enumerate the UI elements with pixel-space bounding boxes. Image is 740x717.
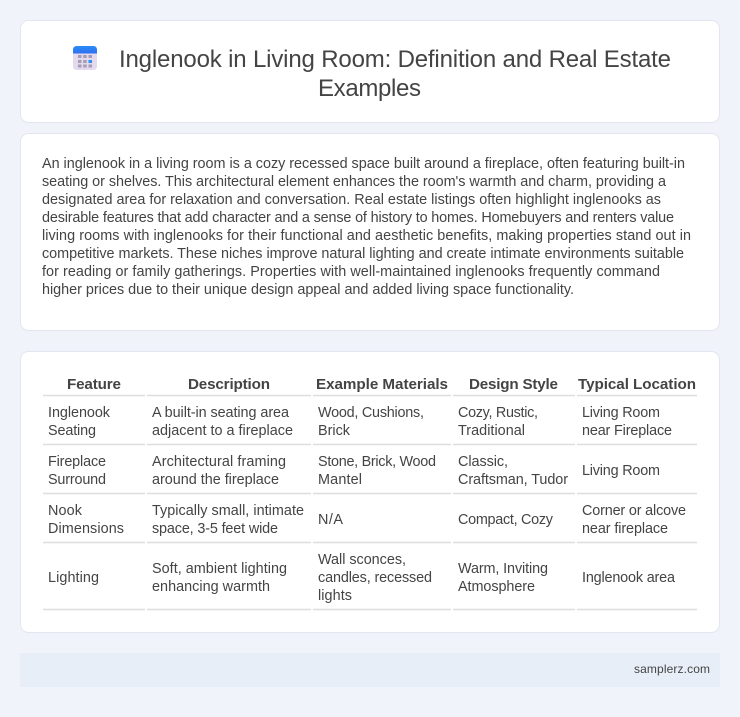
- panel: feature table: [20, 352, 720, 632]
- table row: Inglenook Seating: Cozy, Rustic,: [458, 405, 538, 421]
- table row: Lighting: Soft, ambient lighting: [152, 561, 287, 577]
- table row: Nook Dimensions: Dimensions: [48, 521, 124, 537]
- text block: introduction paragraph: [42, 156, 691, 298]
- text block: introduction paragraph: An inglenook in a living room is a cozy recessed space built around a fireplace, often featuring built-in: [42, 156, 685, 172]
- table header: [43, 376, 697, 396]
- table row: Fireplace Surround: Surround: [48, 472, 106, 488]
- table row: Nook Dimensions: Typically small, intimate: [152, 503, 304, 519]
- title: Inglenook in Living Room: Definition and Real Estate: [119, 46, 671, 73]
- table header: Design Style: [469, 376, 558, 393]
- title: Examples: [318, 75, 421, 102]
- table header: Example Materials: [316, 376, 448, 393]
- table row: Lighting: Wall sconces,: [318, 552, 406, 568]
- table row: Fireplace Surround: Living Room: [582, 463, 660, 479]
- table row: Lighting: Atmosphere: [458, 579, 535, 595]
- table row: Lighting: Warm, Inviting: [458, 561, 548, 577]
- table row: Fireplace Surround: around the fireplace: [152, 472, 279, 488]
- table row: Nook Dimensions: Corner or alcove: [582, 503, 686, 519]
- title: [119, 46, 671, 102]
- text block: introduction paragraph: competitive markets. These niches improve natural lighting and create intimate environments suitable: [42, 246, 684, 262]
- table row: Lighting: enhancing warmth: [152, 579, 270, 595]
- text block: introduction paragraph: higher prices due to their unique design appeal and added living space functionality.: [42, 282, 574, 298]
- table row: Inglenook Seating: [43, 405, 697, 444]
- text block: introduction paragraph: for reading or family gatherings. Properties with well-maintained inglenooks frequently command: [42, 264, 660, 280]
- table header: Typical Location: [578, 376, 696, 393]
- table row: Fireplace Surround: Craftsman, Tudor: [458, 472, 568, 488]
- table row: Inglenook Seating: Living Room: [582, 405, 660, 421]
- text block: introduction paragraph: living rooms with inglenooks for their functional and aesthetic benefits, making properties stand out in: [42, 228, 691, 244]
- table row: Lighting: [43, 552, 697, 610]
- table row: Inglenook Seating: near Fireplace: [582, 423, 672, 439]
- footer: samplerz.com: [634, 662, 710, 676]
- panel: header: [20, 20, 720, 122]
- table row: Nook Dimensions: near fireplace: [582, 521, 668, 537]
- table row: Inglenook Seating: Seating: [48, 423, 96, 439]
- table row: Inglenook Seating: adjacent to a fireplace: [152, 423, 293, 439]
- table row: Fireplace Surround: Mantel: [318, 472, 362, 488]
- text block: introduction paragraph: designated area for relaxation and conversation. Real estate listings often highlight inglenooks as: [42, 192, 661, 208]
- text block: introduction paragraph: seating or shelves. This architectural element enhances the room's warmth and charm, providing a: [42, 174, 666, 190]
- table row: Fireplace Surround: [43, 454, 697, 494]
- table row: Nook Dimensions: N/A: [318, 512, 343, 528]
- table row: Fireplace Surround: Classic,: [458, 454, 508, 470]
- icon: calendar: [73, 46, 97, 70]
- table row: Lighting: lights: [318, 588, 352, 604]
- footer: [20, 653, 720, 687]
- text block: introduction paragraph: desirable features that add character and a sense of history to homes. Homebuyers and renters value: [42, 210, 674, 226]
- table row: Inglenook Seating: Brick: [318, 423, 351, 439]
- table row: Nook Dimensions: Nook: [48, 503, 83, 519]
- table row: Inglenook Seating: Wood, Cushions,: [318, 405, 424, 421]
- table header: Description: [188, 376, 270, 393]
- panel: introduction: [20, 134, 720, 330]
- table header: Feature: [67, 376, 121, 393]
- table row: Nook Dimensions: Compact, Cozy: [458, 512, 554, 528]
- table row: Lighting: candles, recessed: [318, 570, 432, 586]
- table row: Lighting: Lighting: [48, 570, 99, 586]
- table row: Nook Dimensions: space, 3-5 feet wide: [152, 521, 278, 537]
- table row: Inglenook Seating: A built-in seating area: [152, 405, 289, 421]
- table row: Inglenook Seating: Inglenook: [48, 405, 111, 421]
- table row: Inglenook Seating: Traditional: [458, 423, 525, 439]
- table row: Fireplace Surround: Fireplace: [48, 454, 106, 470]
- table row: Nook Dimensions: [43, 503, 697, 542]
- table row: Fireplace Surround: Stone, Brick, Wood: [318, 454, 436, 470]
- table row: Lighting: Inglenook area: [582, 570, 675, 586]
- table row: Fireplace Surround: Architectural framing: [152, 454, 286, 470]
